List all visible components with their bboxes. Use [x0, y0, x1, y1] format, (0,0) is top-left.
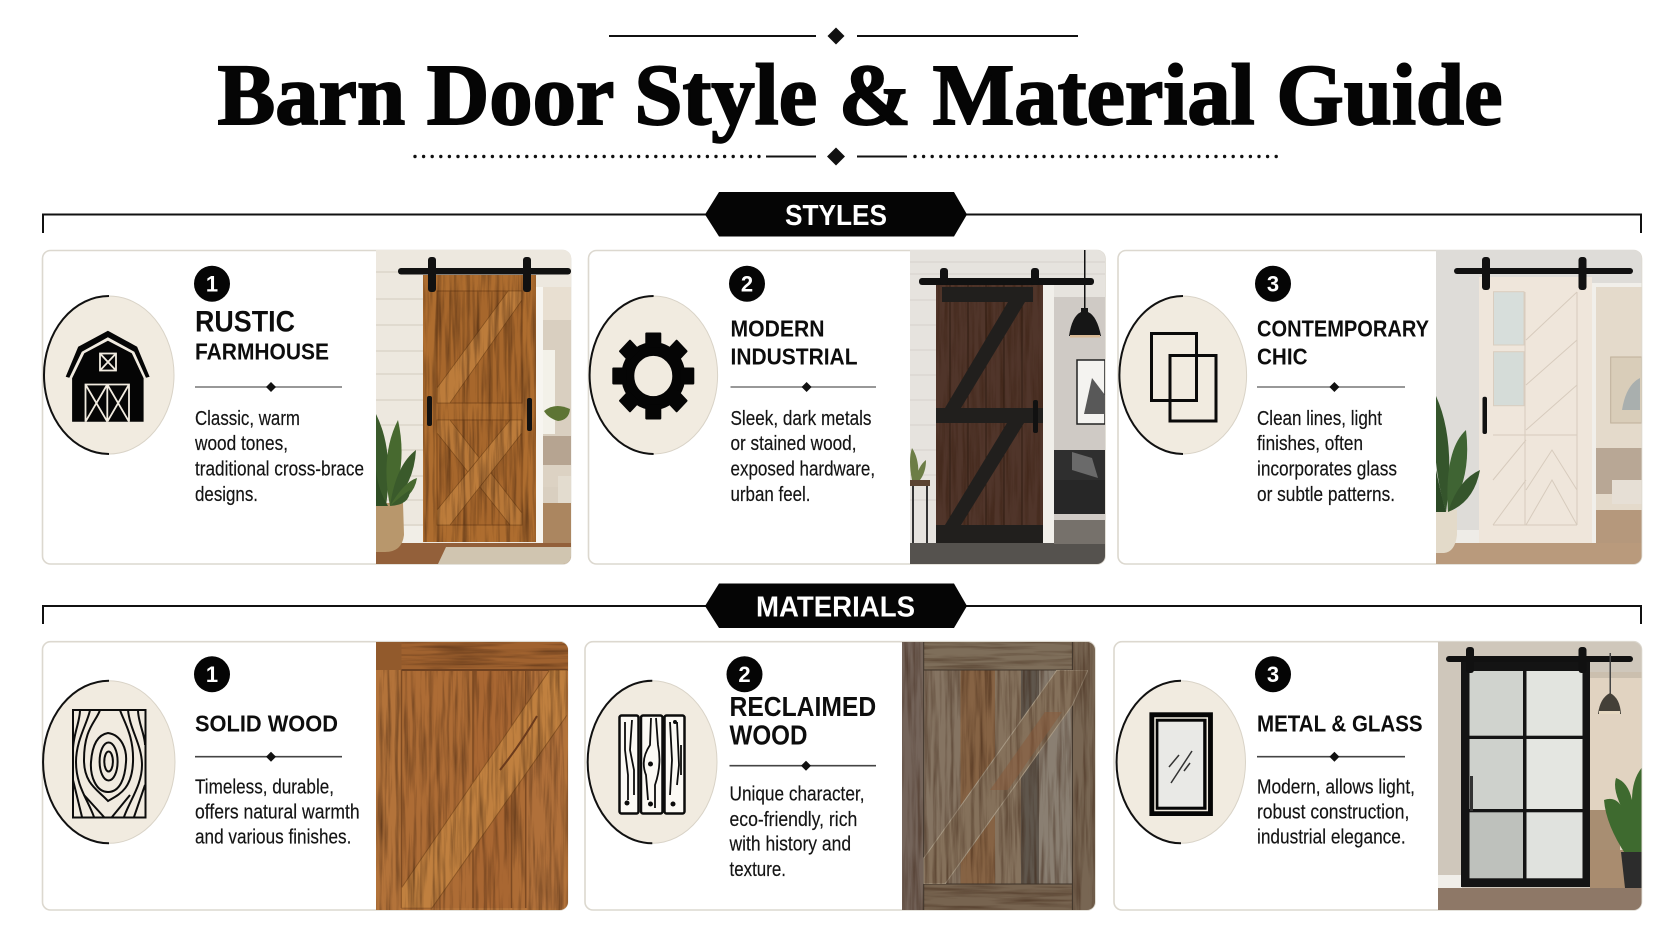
- description: [1257, 775, 1415, 848]
- photo: contemporary door: [1434, 250, 1642, 564]
- number badge 3: 3: [1267, 662, 1279, 687]
- icon badge: reclaimed planks: [588, 681, 717, 843]
- heading: modern industrial: INDUSTRIAL: [730, 343, 858, 369]
- heading: solid wood: SOLID WOOD: [195, 711, 338, 737]
- icon badge: barn: [44, 296, 174, 454]
- number badge 2: 2: [741, 272, 753, 296]
- description: offers natural warmth: [195, 800, 360, 823]
- divider: [195, 752, 342, 762]
- heading: contemporary chic: CHIC: [1257, 343, 1308, 369]
- description: Unique character,: [730, 783, 864, 806]
- heading: metal and glass: METAL & GLASS: [1257, 711, 1423, 737]
- description: designs.: [195, 483, 258, 506]
- panel: metal and glass: [1114, 642, 1642, 910]
- description: exposed hardware,: [730, 458, 875, 481]
- description: [729, 783, 864, 881]
- description: Timeless, durable,: [195, 775, 334, 798]
- divider: [1257, 382, 1405, 392]
- icon badge: framed glass: [1116, 681, 1246, 843]
- section header: styles: [43, 192, 1641, 236]
- divider: [1257, 752, 1405, 762]
- description: finishes, often: [1257, 432, 1363, 455]
- number badge 1: 1: [206, 272, 218, 296]
- description: traditional cross-brace: [195, 458, 364, 481]
- description: wood tones,: [194, 432, 288, 455]
- divider: [195, 382, 342, 392]
- section header: styles: STYLES: [785, 200, 887, 232]
- lower ornament: [415, 148, 1277, 166]
- heading: rustic farmhouse: RUSTIC: [195, 306, 295, 339]
- top ornament: [609, 28, 1078, 44]
- icon badge: gear: [590, 296, 718, 454]
- description: robust construction,: [1257, 800, 1409, 823]
- description: incorporates glass: [1257, 458, 1397, 481]
- description: [1257, 407, 1397, 506]
- description: or subtle patterns.: [1257, 483, 1395, 506]
- description: and various finishes.: [195, 825, 351, 848]
- heading: reclaimed wood: RECLAIMED: [730, 691, 876, 722]
- number badge 3: 3: [1267, 272, 1279, 296]
- panel: modern industrial: [588, 250, 1105, 564]
- divider: [730, 382, 876, 392]
- photo: rustic door: [374, 250, 571, 564]
- description: eco-friendly, rich: [730, 808, 857, 831]
- heading: rustic farmhouse: [195, 306, 329, 364]
- description: with history and: [729, 833, 851, 856]
- number badge 2: [726, 656, 762, 692]
- description: Modern, allows light,: [1257, 775, 1415, 798]
- description: texture.: [730, 858, 786, 881]
- description: [730, 407, 875, 506]
- description: urban feel.: [730, 483, 810, 506]
- section header: materials: [43, 584, 1641, 628]
- heading: contemporary chic: [1257, 316, 1429, 369]
- description: or stained wood,: [730, 432, 856, 455]
- description: [195, 775, 360, 848]
- photo: industrial door: [910, 250, 1105, 564]
- number badge 2: [729, 266, 765, 302]
- panel: contemporary chic: [1118, 250, 1642, 564]
- divider: [730, 761, 876, 771]
- panel: reclaimed wood: [585, 642, 1095, 910]
- number badge 1: [194, 266, 230, 302]
- photo: solid wood: [376, 642, 568, 910]
- section header: materials: MATERIALS: [756, 592, 915, 624]
- number badge 3: [1255, 656, 1291, 692]
- photo: reclaimed wood: [902, 642, 1095, 910]
- description: Clean lines, light: [1257, 407, 1382, 430]
- panel: solid wood: [42, 642, 568, 910]
- photo: metal and glass door: [1438, 642, 1642, 910]
- description: Sleek, dark metals: [730, 407, 872, 430]
- number badge 1: 1: [206, 662, 218, 687]
- icon badge: overlapping frames: [1119, 296, 1247, 454]
- icon badge: wood grain: [43, 681, 175, 843]
- heading: contemporary chic: CONTEMPORARY: [1257, 316, 1429, 342]
- panel: rustic farmhouse: [42, 250, 571, 564]
- number badge 2: 2: [738, 662, 751, 687]
- heading: rustic farmhouse: FARMHOUSE: [195, 338, 329, 364]
- description: Classic, warm: [195, 407, 300, 430]
- title: Barn Door Style & Material Guide: [218, 46, 1502, 143]
- heading: reclaimed wood: WOOD: [730, 719, 808, 750]
- description: industrial elegance.: [1257, 825, 1406, 848]
- heading: modern industrial: [730, 316, 858, 369]
- number badge 1: [194, 656, 230, 692]
- heading: modern industrial: MODERN: [730, 316, 824, 342]
- heading: reclaimed wood: [730, 691, 876, 750]
- number badge 3: [1255, 266, 1291, 302]
- description: [194, 407, 364, 506]
